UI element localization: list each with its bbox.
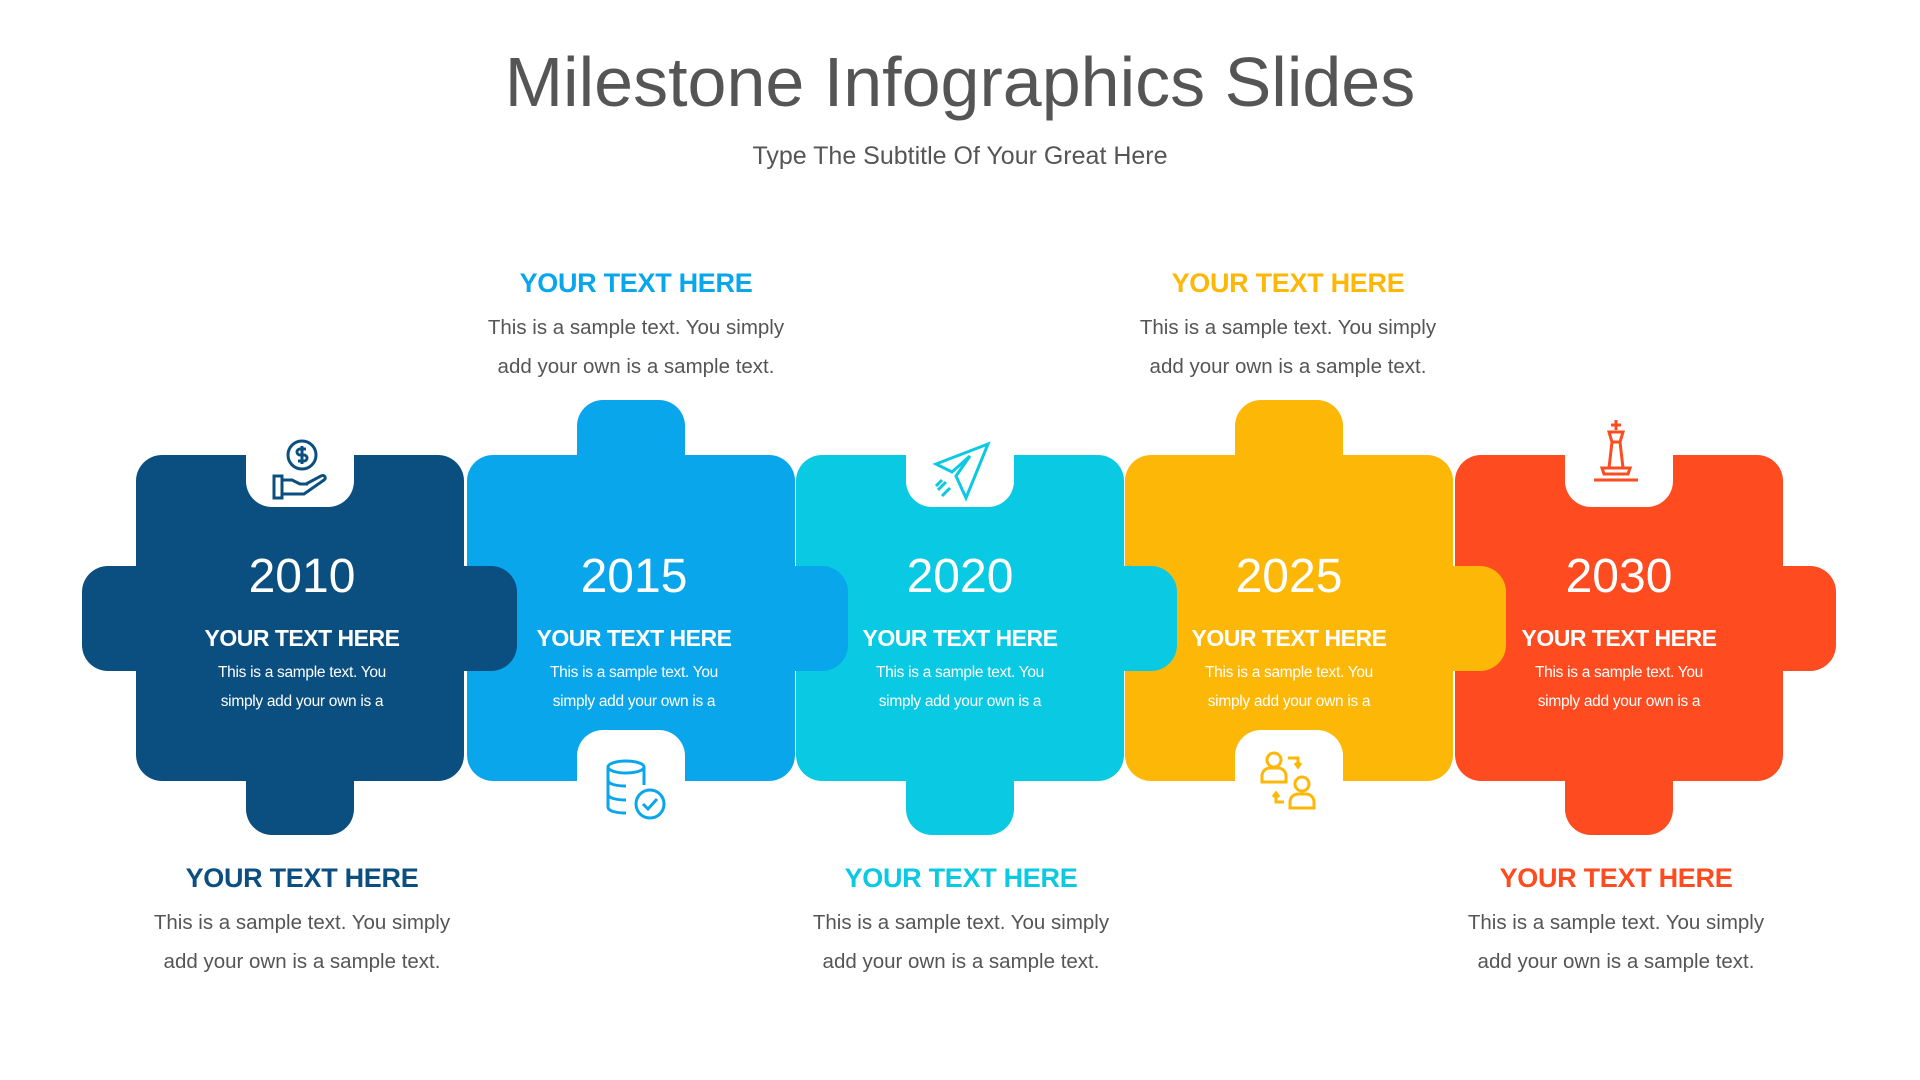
label bottom 2030: YOUR TEXT HERE <box>1500 863 1732 893</box>
piece 1: 2010: 2010 <box>249 550 355 603</box>
label bottom 2020: This is a sample text. You simply <box>813 911 1109 934</box>
piece 5: 2030: This is a sample text. You <box>1535 664 1703 681</box>
piece 5: 2030: 2030 <box>1566 550 1672 603</box>
label bottom 2010: YOUR TEXT HERE <box>186 863 418 893</box>
icon: chess king <box>1594 420 1638 482</box>
piece 4: 2025: This is a sample text. You <box>1205 664 1373 681</box>
label bottom 2030 <box>1468 863 1764 973</box>
label top 2015: This is a sample text. You simply <box>488 316 784 339</box>
label top 2015: YOUR TEXT HERE <box>520 268 752 298</box>
label top 2015 <box>488 268 784 378</box>
piece 3: 2020: simply add your own is a <box>879 693 1041 710</box>
label top 2025: This is a sample text. You simply <box>1140 316 1436 339</box>
piece 2: 2015: 2015 <box>581 550 687 603</box>
label bottom 2010: This is a sample text. You simply <box>154 911 450 934</box>
piece 4: 2025: YOUR TEXT HERE <box>1192 625 1386 651</box>
label bottom 2020: YOUR TEXT HERE <box>845 863 1077 893</box>
icon: hand with coin <box>272 440 327 500</box>
title: Milestone Infographics Slides <box>505 43 1415 121</box>
piece 1: 2010: This is a sample text. You <box>218 664 386 681</box>
icon: people exchange <box>1260 752 1316 810</box>
piece 1: 2010: simply add your own is a <box>221 693 383 710</box>
label top 2015: add your own is a sample text. <box>498 355 774 378</box>
label top 2025: add your own is a sample text. <box>1150 355 1426 378</box>
label bottom 2020 <box>813 863 1109 973</box>
label bottom 2010 <box>154 863 450 973</box>
label top 2025 <box>1140 268 1436 378</box>
piece 4: 2025: simply add your own is a <box>1208 693 1370 710</box>
piece 2: 2015: This is a sample text. You <box>550 664 718 681</box>
piece 5: 2030: simply add your own is a <box>1538 693 1700 710</box>
piece 5: 2030: YOUR TEXT HERE <box>1522 625 1716 651</box>
piece 3: 2020: This is a sample text. You <box>876 664 1044 681</box>
piece 2: 2015: YOUR TEXT HERE <box>537 625 731 651</box>
piece 4: 2025: 2025 <box>1236 550 1342 603</box>
label bottom 2010: add your own is a sample text. <box>164 950 440 973</box>
piece 1: 2010: YOUR TEXT HERE <box>205 625 399 651</box>
subtitle: Type The Subtitle Of Your Great Here <box>752 142 1168 170</box>
icon: database check <box>606 760 666 820</box>
label bottom 2020: add your own is a sample text. <box>823 950 1099 973</box>
label bottom 2030: This is a sample text. You simply <box>1468 911 1764 934</box>
piece 3: 2020: YOUR TEXT HERE <box>863 625 1057 651</box>
piece 2: 2015: simply add your own is a <box>553 693 715 710</box>
label bottom 2030: add your own is a sample text. <box>1478 950 1754 973</box>
piece 3: 2020: 2020 <box>907 550 1013 603</box>
icon: paper plane <box>932 441 991 502</box>
label top 2025: YOUR TEXT HERE <box>1172 268 1404 298</box>
